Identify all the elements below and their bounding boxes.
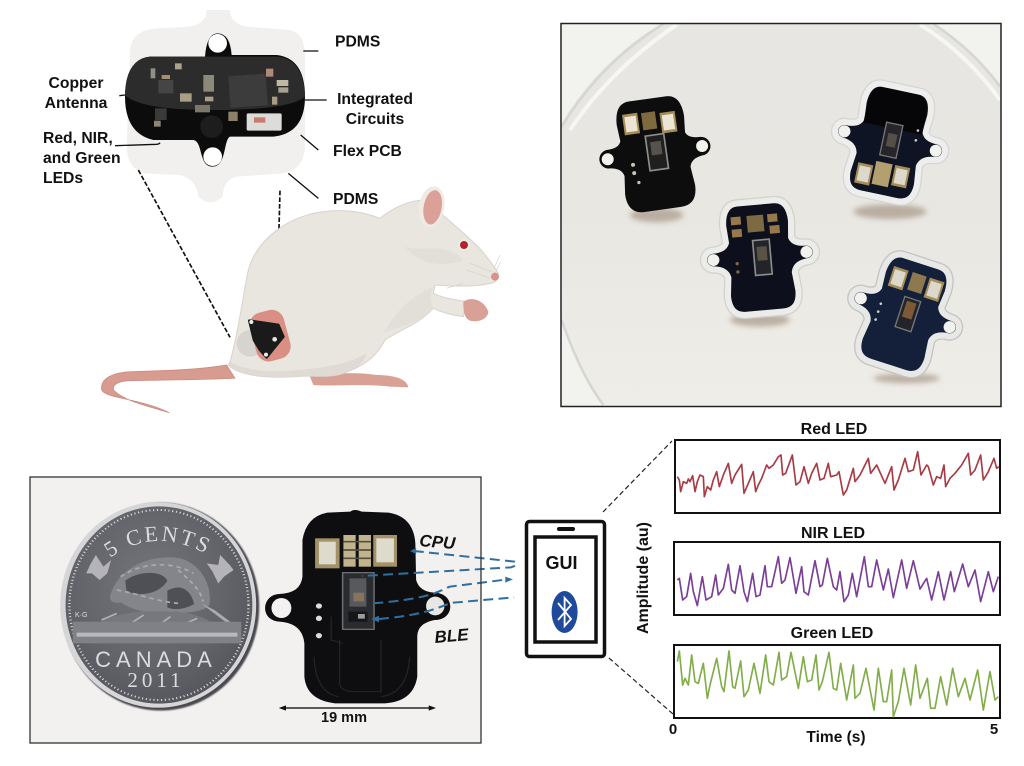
chart title: Green LED: Green LED [791,625,873,642]
label: integrated circuits: Integrated [337,91,413,108]
dish [562,24,1000,405]
device 1 [592,91,718,217]
device 2 [823,76,956,209]
axis tick 0: 0 [669,721,677,738]
label: LEDs: LEDs [43,170,83,187]
chart title: Red LED: Red LED [801,421,867,438]
chart: LED signal traces [635,421,1000,746]
label: flex PCB: Flex PCB [333,143,402,160]
label: BLE: BLE [434,625,470,647]
flex PCB close-up [125,33,305,167]
coin engraving 2011: 2011 [127,668,185,692]
icon: bluetooth [552,591,578,633]
shadows [630,204,940,383]
beaver [110,557,210,613]
panel: coin and device photo [29,476,516,744]
chart: Red LED [675,440,1000,513]
panel: photo of devices in petri dish [561,24,1001,406]
label: copper antenna: Copper [49,75,103,92]
LED block on PCB [247,113,282,131]
axis label: amplitude: Amplitude (au) [635,522,652,634]
label: LEDs: and Green [43,150,121,167]
label: PDMS top: PDMS [335,34,380,50]
device 3 [699,197,821,318]
axis tick 5: 5 [990,721,998,738]
maple leaves [86,555,111,580]
dashed zoom lines from phone to charts [603,441,673,714]
19 mm dimension arrow [279,705,436,711]
chart: Green LED [674,645,1000,718]
label: integrated circuits: Circuits [346,111,404,128]
panel: rat with implant [43,10,501,413]
leader lines [115,51,327,337]
label: copper antenna: Antenna [45,95,108,112]
implant on rat [237,307,294,364]
label: PDMS bottom: PDMS [333,191,378,208]
axis label: time: Time (s) [806,729,866,746]
icon: smartphone with GUI [526,522,604,656]
coin engraving 5 CENTS: 5 CENTS [104,526,210,557]
device [265,510,450,703]
chart: NIR LED [674,542,1000,615]
wireless dashed arrows [362,551,516,619]
coin [60,502,259,711]
chart title: NIR LED: NIR LED [801,525,865,542]
label: LEDs: Red, NIR, [43,130,113,147]
label: GUI: GUI [545,553,578,573]
label: CPU: CPU [419,531,457,553]
coin engraving CANADA: CANADA [95,647,217,672]
rat illustration [101,184,501,413]
coin engraving KG: K·G [75,612,87,619]
PDMS halo [127,10,305,202]
label: 19 mm: 19 mm [321,710,367,726]
device 4 [834,244,975,385]
